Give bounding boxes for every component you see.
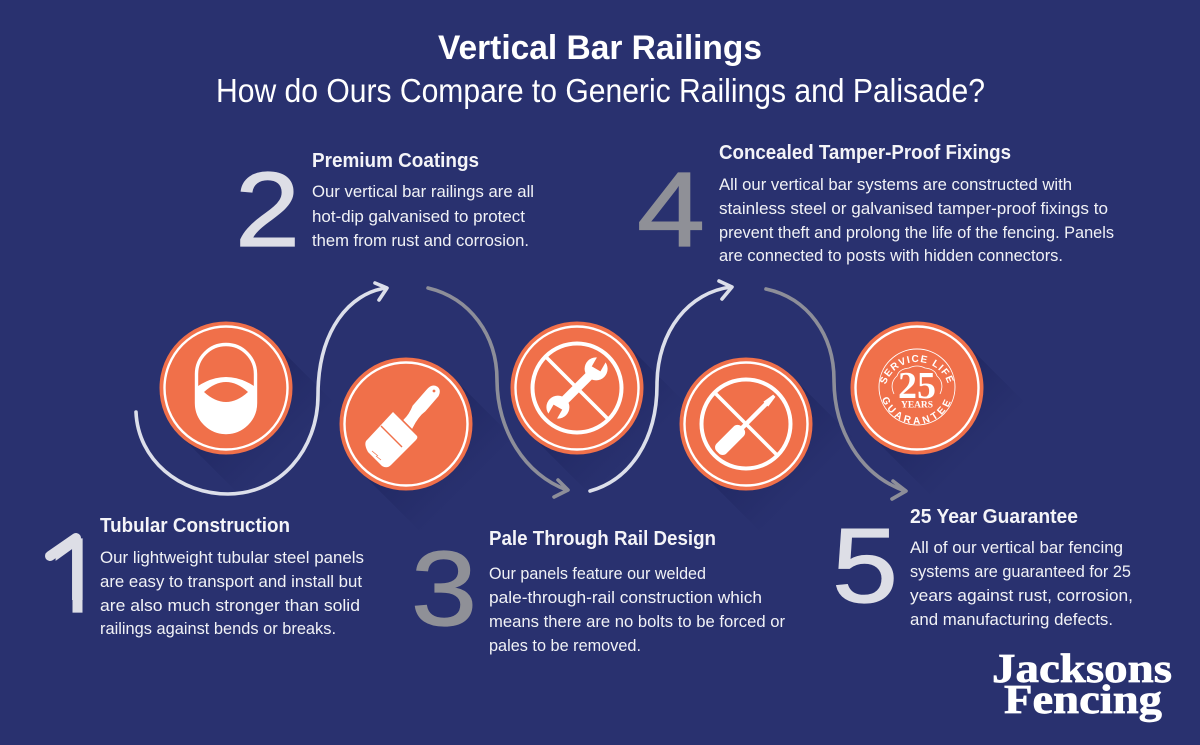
body text: systems are guaranteed for 25 — [910, 562, 1131, 581]
body text: stainless steel or galvanised tamper-proof fixings to — [719, 199, 1108, 218]
body text: Our panels feature our welded — [489, 564, 706, 583]
step 2: premium coatings — [235, 150, 534, 269]
title: How do Ours Compare to Generic Railings and Palisade? — [216, 72, 985, 109]
body text: them from rust and corrosion. — [312, 231, 529, 250]
number 2: 2 — [235, 151, 300, 269]
step 3: pale through rail design — [411, 528, 785, 655]
icon: 25 year guarantee badge: 25 — [898, 365, 936, 407]
body text: and manufacturing defects. — [910, 610, 1113, 629]
body text: Our lightweight tubular steel panels — [100, 548, 364, 567]
icon: 25 year guarantee badge: YEARS — [901, 400, 933, 410]
body text: are also much stronger than solid — [100, 596, 360, 615]
body text: are connected to posts with hidden connectors. — [719, 246, 1063, 265]
heading: 25 Year Guarantee — [910, 506, 1078, 528]
step 5: 25 year guarantee — [832, 506, 1133, 629]
heading: Pale Through Rail Design — [489, 528, 716, 550]
heading: Tubular Construction — [100, 515, 290, 537]
body text: pales to be removed. — [489, 636, 641, 655]
number 1: 1 — [46, 517, 105, 635]
arrow: step 4 to step 5 — [766, 289, 906, 499]
arrow: step 2 to step 3 — [428, 288, 568, 497]
icon: 25 year guarantee badge: SERVICE LIFE — [880, 355, 954, 384]
icon: paint brush — [340, 358, 472, 490]
arrow: step 3 to step 4 — [590, 281, 732, 491]
logo: Jacksons Fencing: Fencing — [1004, 676, 1163, 722]
number 4: 4 — [637, 151, 705, 269]
body text — [100, 548, 364, 638]
title — [216, 29, 985, 109]
number 3: 3 — [411, 530, 477, 648]
icon: tubular construction — [160, 322, 292, 454]
body text — [489, 564, 785, 655]
logo: Jacksons Fencing: Jacksons — [992, 645, 1172, 691]
arrow: step 1 to step 2 — [136, 283, 387, 494]
body text: All of our vertical bar fencing — [910, 538, 1123, 557]
body text — [312, 182, 534, 250]
body text: All our vertical bar systems are constructed with — [719, 175, 1072, 194]
icon: no wrench — [510, 322, 644, 454]
heading: Concealed Tamper-Proof Fixings — [719, 142, 1011, 164]
body text: hot-dip galvanised to protect — [312, 207, 525, 226]
body text: railings against bends or breaks. — [100, 619, 336, 638]
heading: Premium Coatings — [312, 150, 479, 172]
number 5: 5 — [832, 507, 898, 625]
logo: Jacksons Fencing — [992, 645, 1172, 722]
title: Vertical Bar Railings — [438, 29, 762, 67]
body text — [719, 175, 1114, 265]
circle shadows — [179, 341, 1026, 533]
step 1: tubular construction — [46, 515, 364, 638]
body text: Our vertical bar railings are all — [312, 182, 534, 201]
number 1 — [45, 533, 83, 613]
body text — [910, 538, 1133, 629]
icon: no screwdriver — [680, 358, 812, 490]
icon: 25 year guarantee badge: GUARANTEE — [882, 397, 951, 424]
body text: are easy to transport and install but — [100, 572, 362, 591]
body text: pale-through-rail construction which — [489, 588, 762, 607]
icon: 25 year guarantee badge — [850, 322, 984, 454]
body text: means there are no bolts to be forced or — [489, 612, 785, 631]
body text: years against rust, corrosion, — [910, 586, 1133, 605]
body text: prevent theft and prolong the life of the fencing. Panels — [719, 223, 1114, 242]
step 4: concealed tamper-proof fixings — [637, 142, 1114, 269]
